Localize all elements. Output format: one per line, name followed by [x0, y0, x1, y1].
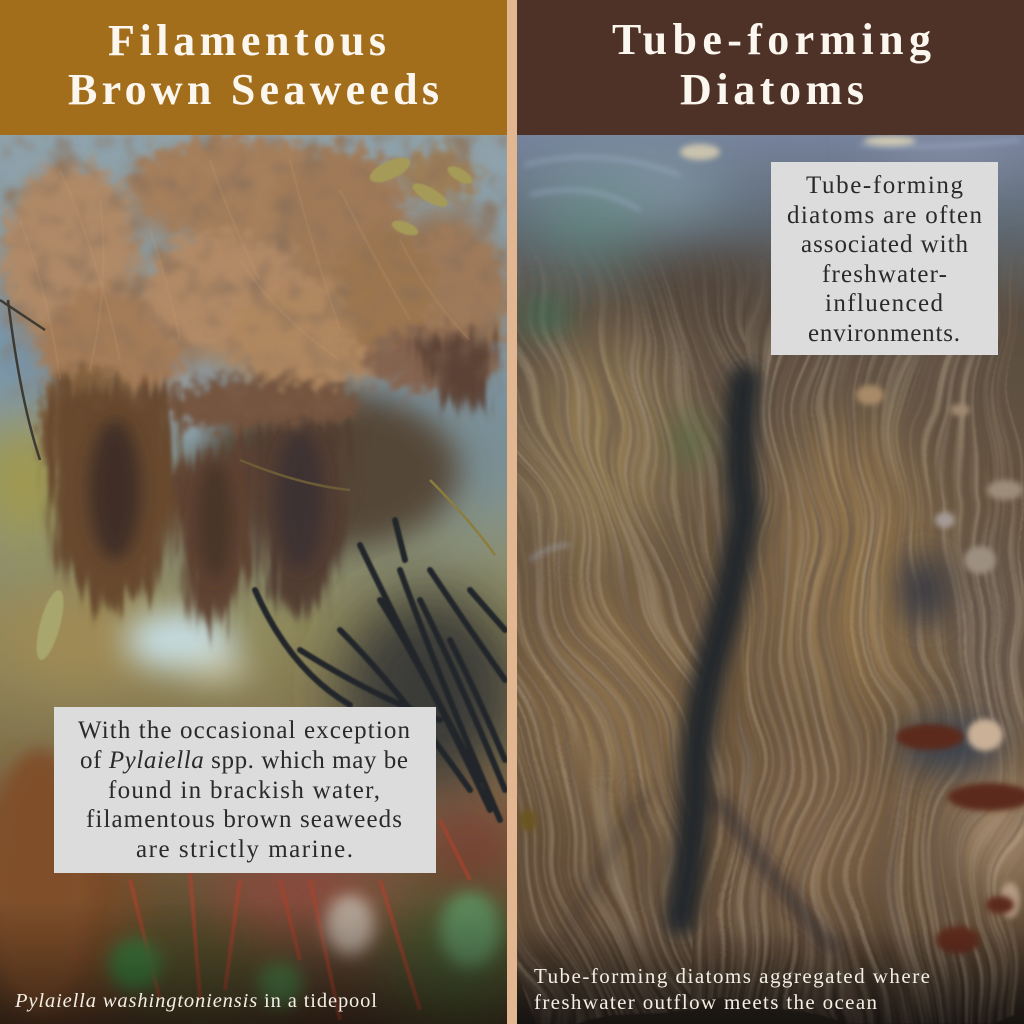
callout: freshwater note on the right photo: environments.	[808, 320, 960, 347]
dark kelp stipes	[255, 520, 505, 820]
callout: freshwater note on the right photo: influenced	[825, 290, 944, 317]
hair-like diatom streak texture	[517, 268, 1024, 1024]
callout: marine note on the left photo: filamentous brown seaweeds	[86, 806, 402, 833]
heading: Filamentous Brown Seaweeds	[68, 16, 439, 114]
fine frond texture	[20, 160, 470, 380]
heading: Tube-forming Diatoms: Tube-forming	[612, 15, 931, 64]
caption: right photo: Tube-forming diatoms aggregated where	[534, 964, 930, 988]
heading: Tube-forming Diatoms: Diatoms	[680, 65, 864, 114]
callout: marine note on the left photo: found in brackish water,	[108, 777, 380, 804]
caption: right photo: freshwater outflow meets the ocean	[534, 990, 878, 1014]
panel: left header	[0, 0, 507, 135]
heading: Filamentous Brown Seaweeds: Filamentous	[108, 16, 386, 65]
callout: freshwater note on the right photo: diatoms are often	[787, 202, 982, 229]
callout: marine note on the left photo: With the occasional exception	[78, 717, 410, 744]
red algae bottom	[128, 819, 472, 1020]
panel: right header	[517, 0, 1024, 135]
panel: photo of tube-forming diatoms at freshwater outflow	[517, 135, 1024, 1024]
dark hanging fronds	[45, 335, 495, 635]
callout: freshwater note on the right photo: freshwater-	[822, 261, 947, 288]
panel: photo of Pylaiella seaweed in a tidepool	[0, 135, 530, 1024]
reddish barnacle clumps	[519, 724, 1024, 954]
dark central channel	[560, 380, 835, 950]
left side dark strands and yellow bladders	[0, 300, 495, 555]
callout: freshwater note on the right photo	[771, 162, 998, 355]
callout: freshwater note on the right photo: Tube-forming	[806, 172, 964, 199]
callout: marine note on the left photo: are strictly marine.	[136, 836, 353, 863]
divider between panels	[507, 0, 517, 1024]
callout: freshwater note on the right photo: associated with	[801, 231, 968, 258]
caption: right photo	[534, 964, 930, 1014]
heading: Filamentous Brown Seaweeds: Brown Seaweeds	[68, 65, 439, 114]
seaweed tan tufts	[4, 137, 508, 485]
dark background shadow behind fronds	[8, 155, 500, 682]
callout: marine note on the left photo: of Pylaiella spp. which may be	[80, 747, 408, 774]
water highlights	[525, 140, 1020, 560]
caption: left photo: Pylaiella washingtoniensis in a tidepool	[14, 990, 377, 1012]
callout: marine note on the left photo	[54, 707, 436, 873]
heading: Tube-forming Diatoms	[612, 15, 931, 114]
mottled tuft shading	[0, 135, 507, 396]
